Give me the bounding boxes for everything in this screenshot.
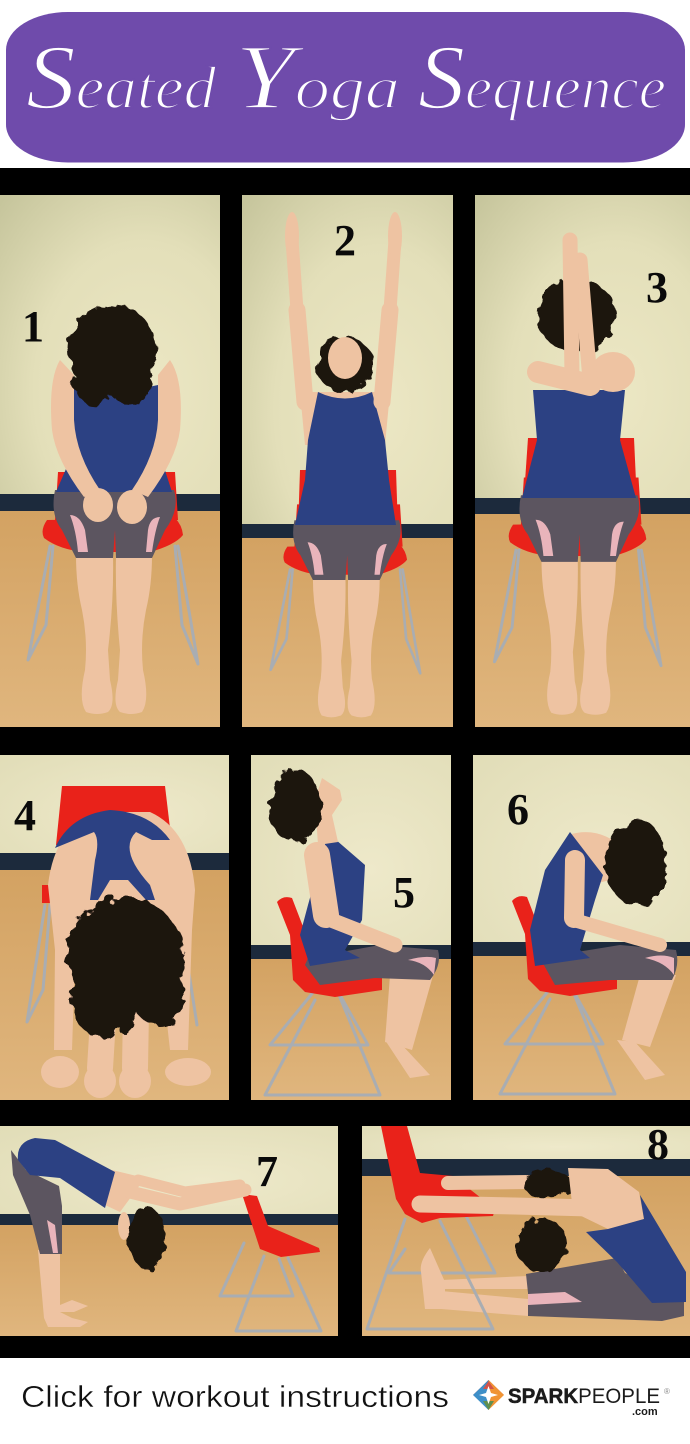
- step number 8: 8: [647, 1120, 669, 1169]
- panel: pose 6 seated cat: [473, 755, 690, 1100]
- title banner: Sequence: [418, 26, 666, 128]
- title banner: Yoga: [235, 26, 400, 128]
- logo wordmark: ®: [664, 1387, 670, 1396]
- panel: pose 5 seated cow: [251, 755, 451, 1100]
- panel: pose 8 seated forward bend to chair: [362, 1126, 690, 1336]
- step number 3: 3: [646, 263, 668, 312]
- logo wordmark: .com: [632, 1406, 658, 1418]
- icon: SparkPeople diamond logo: [473, 1380, 504, 1410]
- panel: pose 1 forward head bow: [0, 195, 220, 727]
- panel: pose 3 eagle arms: [475, 195, 690, 727]
- call to action text: Click for workout instructions: [21, 1379, 449, 1414]
- step number 2: 2: [334, 216, 356, 265]
- panel: pose 7 standing forward bend to chair: [0, 1126, 338, 1336]
- panel: pose 2 arms overhead: [242, 195, 453, 727]
- logo wordmark: [508, 1385, 670, 1418]
- step number 1: 1: [22, 302, 44, 351]
- title banner: [6, 12, 685, 162]
- step number 7: 7: [256, 1147, 278, 1196]
- title banner: Seated: [26, 26, 217, 128]
- step number 6: 6: [507, 785, 529, 834]
- panel: pose 4 seated forward fold: [0, 755, 229, 1100]
- step number 4: 4: [14, 791, 36, 840]
- logo wordmark: SPARKPEOPLE: [508, 1385, 660, 1408]
- step number 5: 5: [393, 868, 415, 917]
